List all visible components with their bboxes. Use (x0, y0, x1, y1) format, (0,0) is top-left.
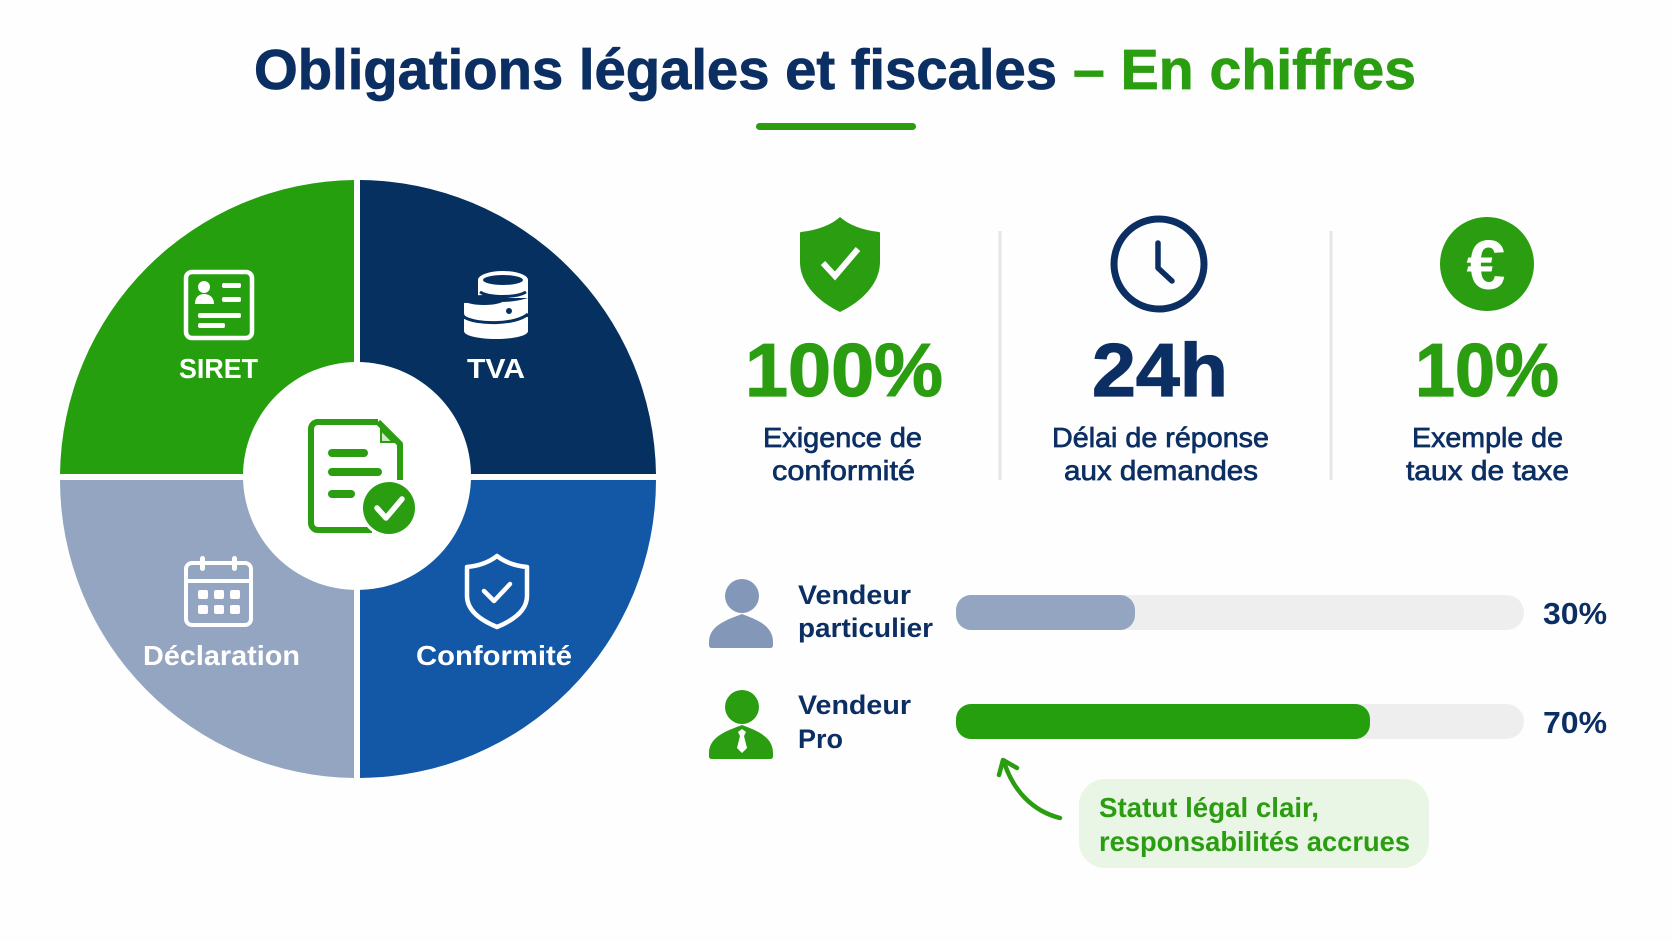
arrow (999, 760, 1060, 818)
label: Vendeur (798, 580, 912, 610)
segment: SIRET (60, 180, 354, 474)
label: TVA: TVA (467, 353, 525, 384)
icon: euro coin (1440, 217, 1534, 311)
stat: 100% (745, 217, 943, 486)
icon: euro coin: € (1467, 226, 1505, 304)
value: 24h (1092, 328, 1228, 412)
icon: person (709, 579, 773, 648)
bar fill 30% (956, 595, 1135, 630)
bar track (956, 595, 1524, 630)
label: SIRET: SIRET (179, 353, 258, 384)
center circle (243, 362, 471, 590)
icon: person with tie (709, 690, 773, 759)
segment: Déclaration (60, 480, 354, 778)
callout (1079, 779, 1429, 868)
label: conformité (772, 455, 915, 486)
icon: calendar (186, 556, 251, 625)
label: taux de taxe (1406, 455, 1569, 486)
label: Conformité: Conformité (416, 640, 572, 671)
segment: Conformité (360, 480, 656, 778)
bar fill 70% (956, 704, 1370, 739)
icon: green shield (800, 217, 880, 312)
segment: TVA (360, 180, 656, 474)
title: – En chiffres (1073, 38, 1416, 102)
label (763, 422, 922, 486)
icon: document with check (311, 422, 418, 537)
callout: Statut légal clair, (1099, 792, 1319, 823)
value: 70% (1543, 705, 1607, 740)
value: 10% (1415, 328, 1559, 412)
label: aux demandes (1064, 455, 1258, 486)
label: Pro (798, 724, 843, 754)
bar track (956, 704, 1524, 739)
divider (998, 231, 1002, 480)
icon: database (464, 271, 528, 339)
label (798, 580, 934, 643)
label: Exigence de (763, 422, 922, 453)
label: Vendeur (798, 690, 912, 720)
label (798, 690, 912, 754)
icon: shield outline (467, 556, 527, 627)
value: 30% (1543, 596, 1607, 631)
stat: 10% (1406, 217, 1569, 486)
label: particulier (798, 613, 934, 643)
label (1406, 422, 1569, 486)
row: Vendeur particulier (709, 579, 1607, 648)
donut chart (60, 180, 656, 778)
icon: clock (1114, 219, 1204, 309)
row: Vendeur Pro (709, 690, 1607, 759)
label: Délai de réponse (1052, 422, 1269, 453)
icon: ID card (186, 272, 252, 338)
divider (1330, 231, 1332, 480)
value: 100% (745, 328, 943, 412)
label (1052, 422, 1269, 486)
title underline (756, 123, 916, 130)
label: Déclaration: Déclaration (143, 640, 300, 671)
stat: 24h (1052, 219, 1269, 486)
title: Obligations légales et fiscales (254, 38, 1057, 102)
label: Exemple de (1412, 422, 1563, 453)
callout: responsabilités accrues (1099, 826, 1410, 857)
